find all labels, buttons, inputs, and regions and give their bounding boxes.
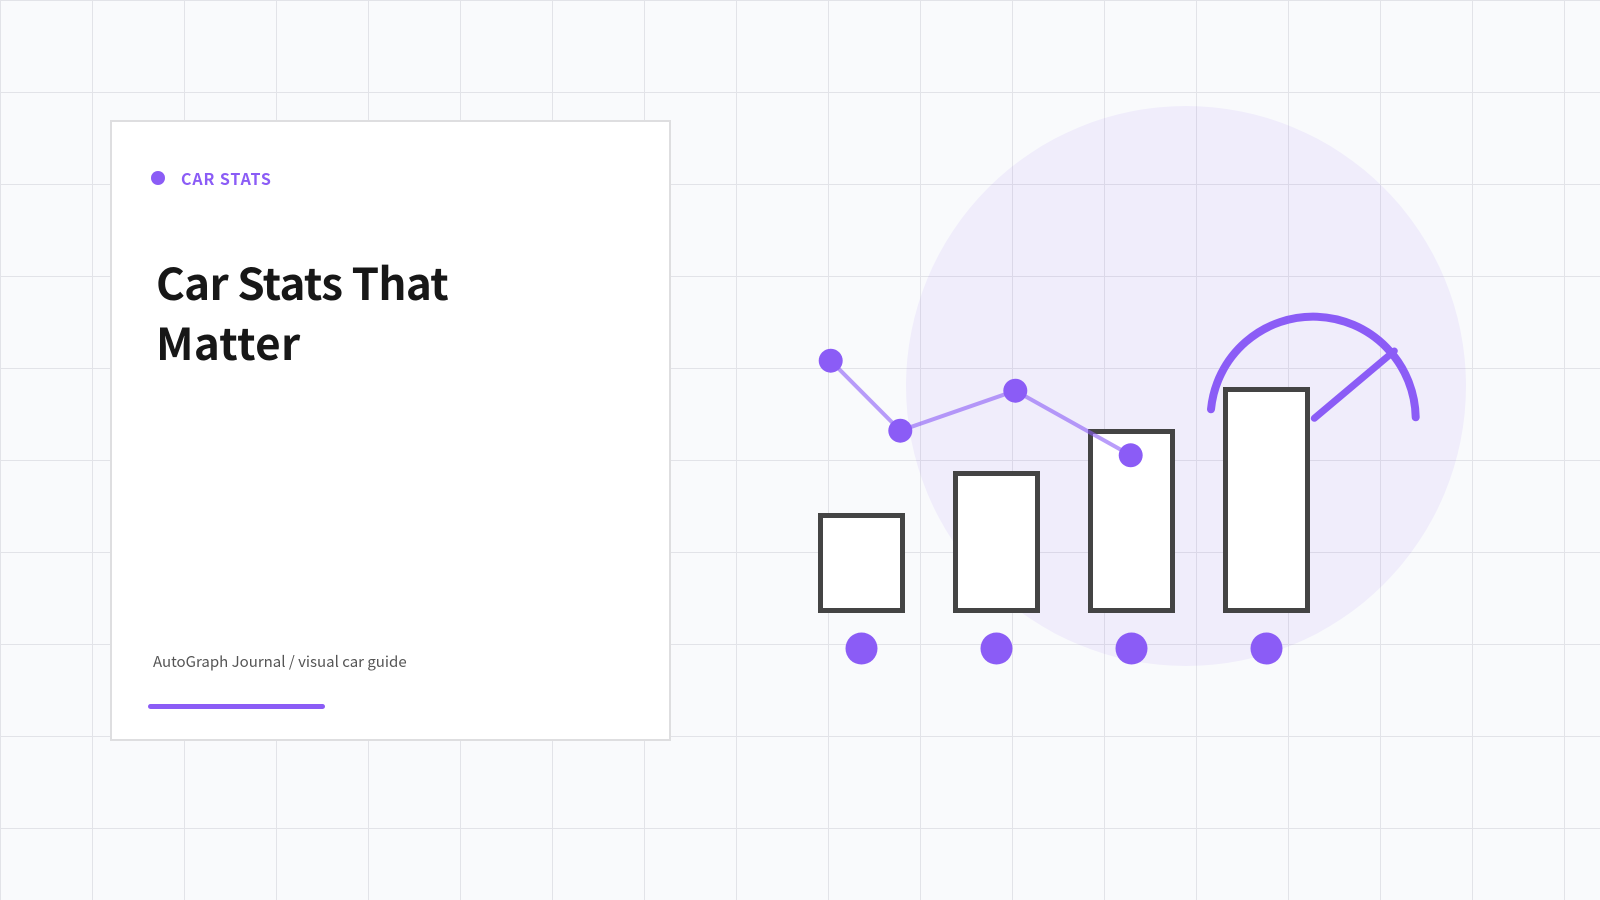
panel: title card	[110, 120, 671, 741]
trend line	[831, 361, 1131, 455]
footer text: AutoGraph Journal / visual car guide	[153, 651, 407, 672]
title: Matter	[156, 308, 300, 372]
bar label dots	[846, 632, 1282, 664]
title	[156, 248, 448, 372]
trend line points	[819, 349, 1143, 467]
accent bar	[148, 704, 325, 709]
gauge	[1211, 317, 1416, 418]
bar chart	[820, 390, 1308, 610]
title: Car Stats That	[156, 248, 448, 312]
eyebrow label: CAR STATS	[181, 166, 272, 190]
icon: label dot	[150, 171, 164, 185]
background circle	[906, 106, 1466, 666]
